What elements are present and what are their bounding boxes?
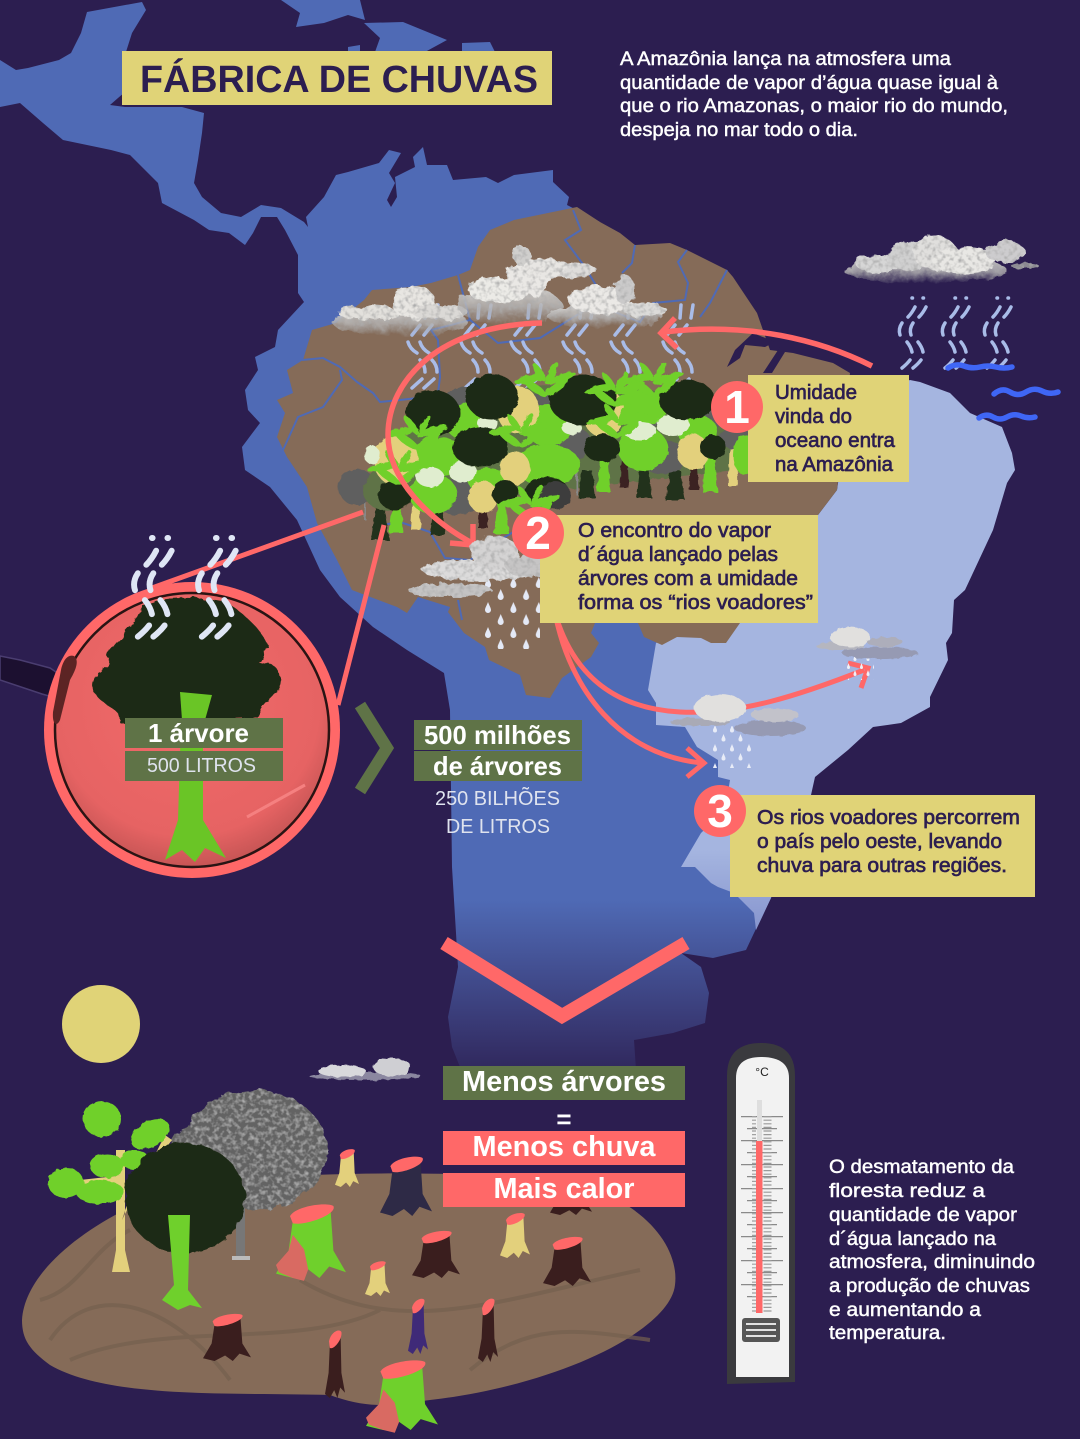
label: 500 million trees: 500 milhões	[424, 720, 571, 750]
lens handle	[0, 656, 56, 698]
intro text	[620, 48, 1008, 141]
rising vapor: single tree	[134, 538, 236, 637]
body text: deforestation: temperatura.	[829, 1322, 946, 1344]
rising vapor: forest	[408, 305, 693, 388]
label: 500 litres: 500 LITROS	[147, 755, 256, 777]
label: one tree	[125, 718, 283, 748]
cloud: over the forest	[332, 246, 667, 336]
crowns: grey	[338, 387, 751, 515]
label: 500 million trees	[414, 720, 582, 781]
lens highlight	[247, 785, 305, 817]
equals sign: =	[556, 1104, 572, 1134]
lens clamp	[53, 656, 77, 724]
intro text: quantidade de vapor d’água quase igual à	[620, 72, 998, 94]
callout 2: O encontro do vapor	[578, 520, 771, 542]
map: river lines	[283, 210, 727, 620]
title: FÁBRICA DE CHUVAS	[140, 57, 538, 101]
tree: green and yellow	[48, 1101, 175, 1272]
label: less trees: Menos árvores	[462, 1066, 666, 1098]
crowns: olive	[363, 411, 637, 510]
palms	[367, 361, 684, 522]
body text: deforestation	[829, 1156, 1035, 1344]
body text: deforestation: a produção de chuvas	[829, 1275, 1030, 1297]
icon: sun	[62, 985, 140, 1063]
chevron: to total	[360, 705, 387, 791]
tree stumps	[203, 1149, 592, 1433]
body text: deforestation: d´água lançado na	[829, 1228, 996, 1250]
rising vapor: ocean	[899, 298, 1011, 368]
cloud: deforested scene	[309, 1058, 421, 1080]
tree: grey	[171, 1090, 327, 1260]
callout 2: d´água lançado pelas	[578, 544, 778, 566]
body text: deforestation: atmosfera, diminuindo	[829, 1251, 1035, 1273]
callout 2: 2	[525, 507, 551, 559]
connector lines to lens	[152, 512, 384, 705]
body text: deforestation: e aumentando a	[829, 1299, 981, 1321]
text: 250 billion litres: 250 BILHÕES	[435, 786, 560, 810]
callout 1: 1	[724, 381, 750, 433]
magnifying lens	[0, 582, 340, 878]
label: more heat	[443, 1173, 685, 1207]
text: 250 billion litres	[435, 786, 560, 838]
callout 3: o país pelo oeste, levando	[757, 831, 1002, 853]
map: Amazon delta	[727, 333, 785, 373]
callout 1	[711, 375, 909, 482]
icon: thermometer	[727, 1043, 795, 1384]
callout 1: vinda do	[775, 406, 852, 428]
arrow: ocean moisture into Amazon	[661, 318, 872, 366]
body text: deforestation: O desmatamento da	[829, 1156, 1014, 1178]
map: Amazon region	[277, 207, 850, 698]
body text: deforestation: quantidade de vapor	[829, 1204, 1018, 1226]
intro text: A Amazônia lança na atmosfera uma	[620, 48, 951, 70]
cloud: central with rain	[670, 694, 806, 768]
ocean waves	[948, 365, 1058, 419]
callout 3	[694, 785, 1035, 897]
tree inner trunk	[180, 692, 212, 720]
tree: dark green	[125, 1143, 245, 1310]
label: less rain: Menos chuva	[472, 1131, 656, 1163]
label: more heat: Mais calor	[494, 1173, 634, 1205]
cloud: south-east with rain	[816, 627, 918, 680]
intro text: que o rio Amazonas, o maior rio do mundo,	[620, 95, 1008, 117]
trunks	[364, 440, 738, 540]
label: 500 litres	[125, 751, 283, 781]
tree trunk	[165, 690, 226, 862]
arrows: flying rivers	[555, 613, 868, 777]
map: continent	[0, 0, 1015, 1095]
icon: thermometer: °C	[755, 1065, 769, 1079]
callout 3: chuva para outras regiões.	[757, 855, 1007, 877]
tree crown	[93, 598, 280, 723]
callout 1: na Amazônia	[775, 454, 894, 476]
body text: deforestation: floresta reduz a	[829, 1180, 985, 1202]
forest backdrop	[395, 384, 735, 510]
callout 1: Umidade	[775, 382, 857, 404]
callout 3: 3	[707, 785, 733, 837]
label: one tree: 1 árvore	[148, 718, 249, 748]
text: 250 billion litres: DE LITROS	[446, 816, 550, 838]
callout 1: oceano entra	[775, 430, 896, 452]
chevron: consequence	[444, 943, 686, 1016]
label: 500 million trees: de árvores	[433, 751, 562, 781]
callout 2	[512, 507, 818, 623]
callout 3: Os rios voadores percorrem	[757, 807, 1020, 829]
cloud: meeting point with rain	[408, 536, 565, 649]
crowns: pale yellow	[374, 386, 709, 513]
callout 2: árvores com a umidade	[578, 568, 798, 590]
map: eastern Brazil	[640, 380, 1015, 930]
ground	[22, 1173, 675, 1405]
arrow: vapour loop	[388, 323, 542, 545]
forest	[338, 361, 757, 540]
crowns: green	[408, 390, 757, 514]
cloud: ocean	[843, 236, 1039, 283]
intro text: despeja no mar todo o dia.	[620, 119, 858, 141]
callout 2: forma os “rios voadores”	[578, 592, 813, 614]
crowns: pale	[364, 414, 690, 487]
crowns: dark	[378, 374, 726, 510]
